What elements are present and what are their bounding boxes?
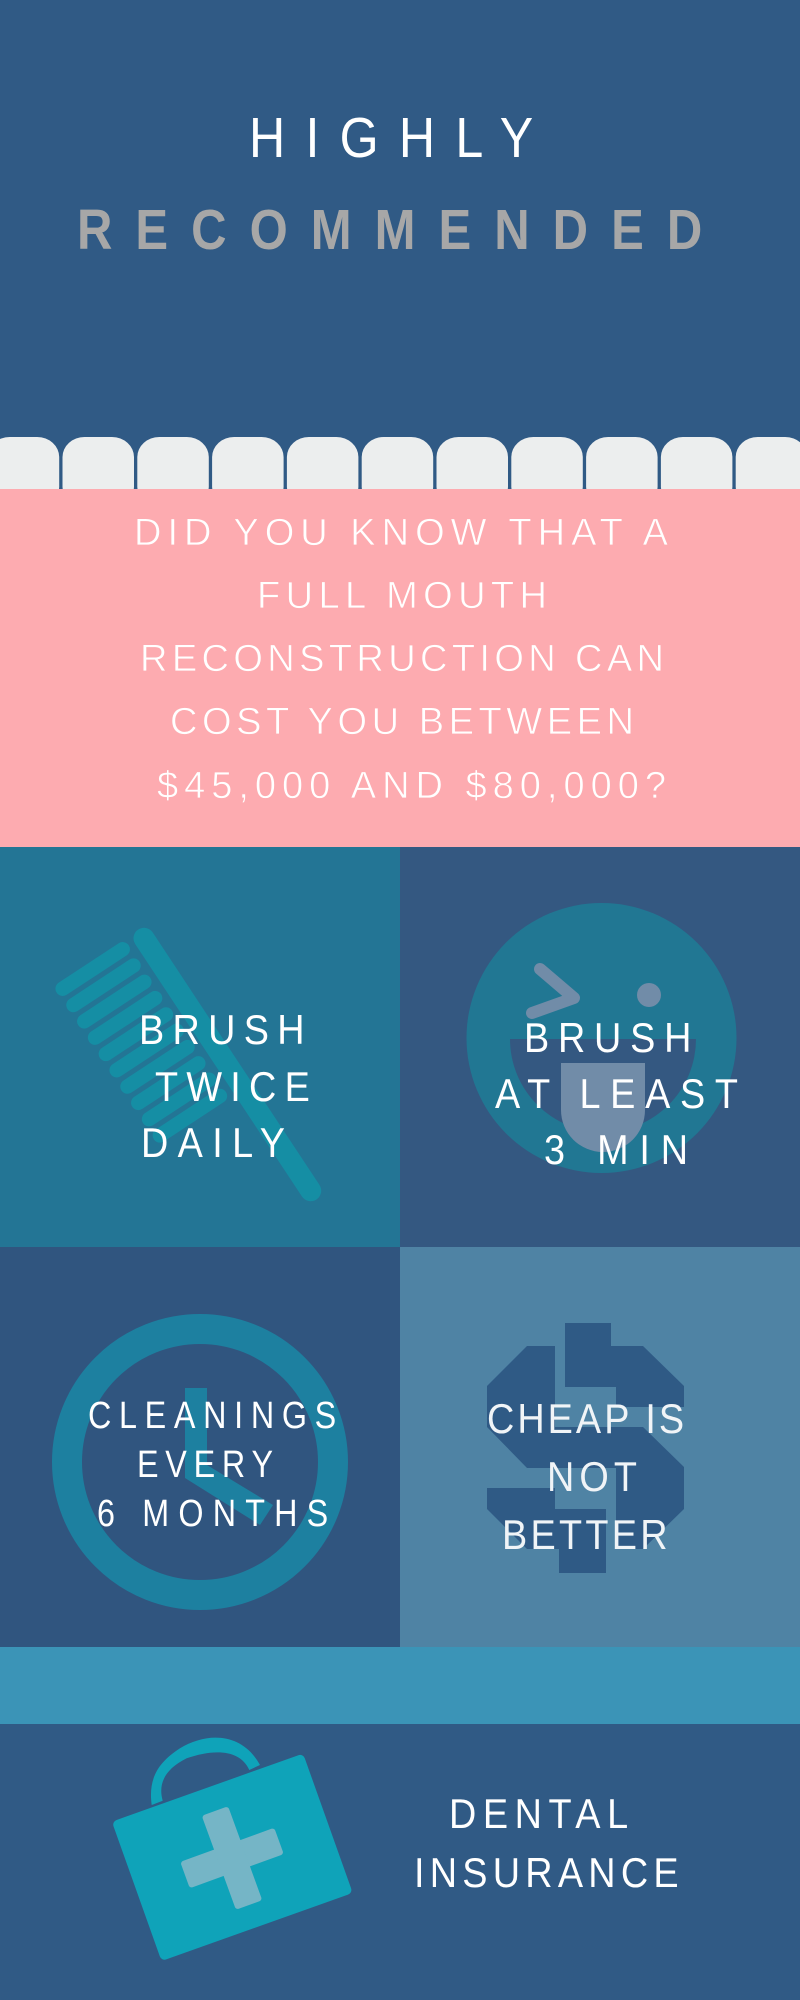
panel: cleanings every 6 months (0, 1247, 400, 1647)
panel: did you know: COST YOU BETWEEN (170, 701, 634, 743)
title: RECOMMENDED (77, 199, 702, 262)
icon: dollar sign (487, 1323, 684, 1573)
panel: did you know: RECONSTRUCTION CAN (140, 638, 664, 680)
icon: medical bag (112, 1738, 353, 1961)
panel: did you know (0, 489, 800, 847)
panel: cheap is not better (400, 1247, 800, 1647)
label: dental insurance (414, 1791, 679, 1896)
label: cleanings every 6 months: CLEANINGS (88, 1395, 336, 1437)
label: brush twice daily: BRUSH (139, 1007, 305, 1053)
label: brush at least 3 min (495, 1015, 738, 1173)
label: cheap is not better: BETTER (502, 1512, 668, 1558)
label: brush at least 3 min: BRUSH (524, 1015, 691, 1061)
label: cleanings every 6 months: 6 MONTHS (97, 1493, 328, 1535)
icon: clock (67, 1329, 333, 1595)
label: brush at least 3 min: 3 MIN (544, 1127, 688, 1173)
label: brush at least 3 min: AT LEAST (495, 1071, 738, 1117)
label: cheap is not better: NOT (547, 1454, 637, 1500)
label: brush twice daily: DAILY (141, 1120, 285, 1166)
label: cleanings every 6 months (88, 1395, 336, 1535)
teal band (0, 1647, 800, 1724)
label: brush twice daily: TWICE (155, 1064, 310, 1110)
label: brush twice daily (139, 1007, 310, 1166)
title (77, 106, 702, 262)
icon: winking smiley (466, 903, 736, 1173)
panel: brush twice daily (0, 847, 400, 1247)
teeth row (0, 437, 800, 507)
label: cleanings every 6 months: EVERY (137, 1444, 273, 1486)
label: dental insurance: INSURANCE (414, 1850, 679, 1896)
label: dental insurance: DENTAL (449, 1791, 628, 1837)
panel: did you know: DID YOU KNOW THAT A (134, 512, 669, 554)
panel: brush at least 3 min (400, 847, 800, 1247)
panel: did you know: $45,000 AND $80,000? (157, 765, 666, 807)
label: cheap is not better: CHEAP IS (487, 1396, 684, 1442)
panel: did you know: FULL MOUTH (257, 575, 547, 617)
icon: toothbrush (63, 938, 311, 1191)
label: cheap is not better (487, 1396, 684, 1558)
title: HIGHLY (249, 106, 533, 170)
